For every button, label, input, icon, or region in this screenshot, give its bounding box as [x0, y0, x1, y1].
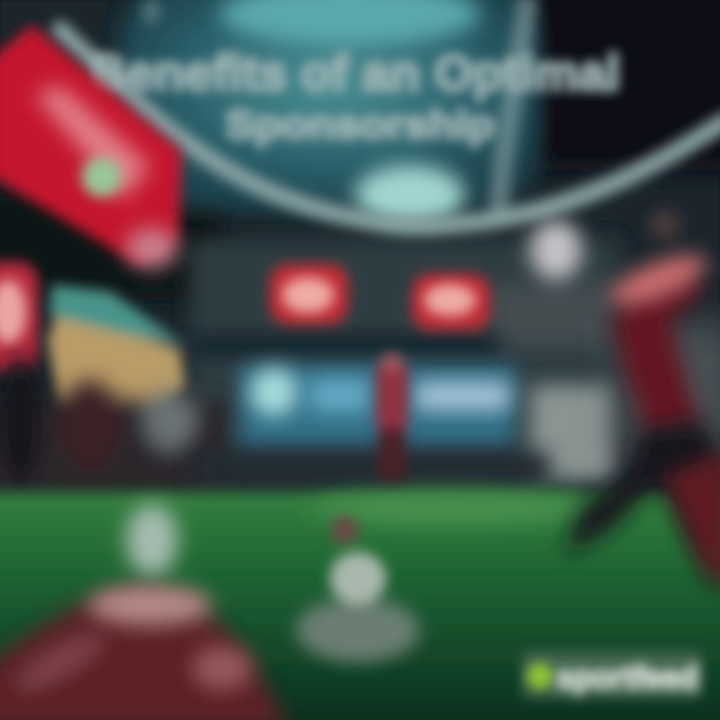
- logo watermark: [522, 652, 702, 698]
- right stand: [530, 385, 615, 480]
- logo watermark: sportfeed: [556, 659, 698, 695]
- crowd left: [0, 355, 230, 495]
- bottle / glass: [126, 504, 178, 576]
- left red sign: [0, 262, 38, 372]
- foreground player right: [565, 213, 720, 590]
- title: Sponsorship: [225, 103, 495, 147]
- red scoreboard signs: [270, 264, 490, 330]
- pitch: [0, 490, 720, 720]
- stadium roof arcs: [55, 0, 720, 225]
- tan stand: [48, 285, 185, 425]
- foreground hand: [0, 585, 290, 720]
- dome: teal sky: [120, 0, 540, 225]
- distant player: [376, 353, 408, 480]
- banner: red flag top left: [0, 25, 182, 268]
- title: Benefits of an Optimal: [90, 45, 620, 101]
- white badge: [530, 220, 582, 280]
- blue led board: [240, 365, 515, 447]
- small trophy on table: [296, 516, 420, 662]
- title: [90, 45, 620, 147]
